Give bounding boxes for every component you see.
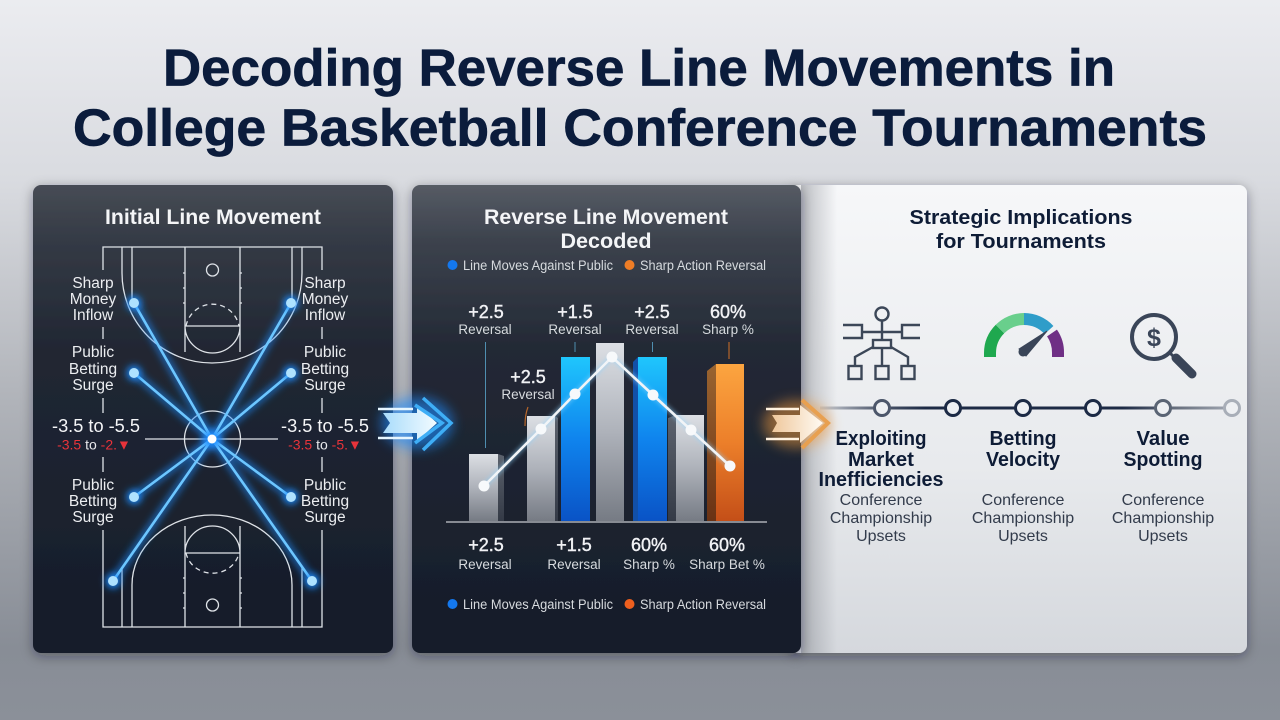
heading: strategic implications bbox=[910, 206, 1132, 253]
column: exploiting market inefficiencies: Upsets bbox=[856, 528, 906, 545]
line values: left: -3.5 to -2.▼ bbox=[57, 436, 131, 452]
court labels: right: Inflow bbox=[305, 307, 346, 324]
court labels: right bbox=[301, 275, 349, 526]
court labels: left bbox=[69, 275, 117, 526]
column: exploiting market inefficiencies: Inefficiencies bbox=[818, 468, 944, 491]
column: value spotting: Championship bbox=[1112, 510, 1214, 527]
court labels: right: Surge bbox=[304, 509, 346, 526]
chart labels: bottom: +2.5 bbox=[468, 535, 504, 555]
chart labels: top: Reversal bbox=[458, 322, 512, 337]
legend: top bbox=[448, 258, 766, 273]
chart labels: top: Sharp % bbox=[702, 322, 754, 337]
court labels: left: Betting bbox=[69, 361, 117, 378]
glowing line movement rays bbox=[106, 296, 319, 588]
legend: top: Line Moves Against Public bbox=[463, 258, 613, 273]
court labels: left: Public bbox=[72, 344, 114, 361]
column: exploiting market inefficiencies: Exploiting bbox=[836, 427, 926, 450]
column: betting velocity bbox=[972, 427, 1074, 545]
chart labels: top: 60% bbox=[710, 302, 746, 322]
legend: bottom: Sharp Action Reversal bbox=[640, 597, 766, 612]
column: betting velocity: Championship bbox=[972, 510, 1074, 527]
court labels: right: Betting bbox=[301, 361, 349, 378]
chart labels: top: +2.5 bbox=[634, 302, 670, 322]
chart labels: bottom: 60% bbox=[631, 535, 667, 555]
court labels: left: Money bbox=[70, 291, 117, 308]
column: value spotting: Spotting bbox=[1124, 448, 1202, 471]
court labels: right: Surge bbox=[304, 377, 346, 394]
chart labels: top: +2.5 bbox=[510, 367, 546, 387]
line values: left bbox=[52, 416, 140, 452]
line values: left: -3.5 to -5.5 bbox=[52, 416, 140, 436]
heading: reverse line movement decoded: Decoded bbox=[560, 230, 652, 253]
court labels: left: Betting bbox=[69, 493, 117, 510]
chart labels: top: Reversal bbox=[625, 322, 679, 337]
chart labels: top bbox=[458, 302, 754, 402]
line values: right bbox=[281, 416, 369, 452]
panel: initial line movement bbox=[33, 185, 393, 653]
heading: reverse line movement decoded bbox=[484, 206, 728, 253]
panel: reverse line movement decoded bbox=[412, 185, 801, 653]
heading: reverse line movement decoded: Reverse Line Movement bbox=[484, 206, 728, 229]
court labels: right: Public bbox=[304, 477, 346, 494]
heading: initial line movement: Initial Line Movement bbox=[105, 206, 321, 229]
column: exploiting market inefficiencies: Championship bbox=[830, 510, 932, 527]
line values: right: -3.5 to -5.▼ bbox=[288, 436, 362, 452]
court labels: right: Public bbox=[304, 344, 346, 361]
chart labels: top: Reversal bbox=[548, 322, 602, 337]
heading: strategic implications: for Tournaments bbox=[936, 230, 1106, 253]
chart labels: bottom: +1.5 bbox=[556, 535, 592, 555]
arrow: orange bbox=[763, 400, 831, 448]
court labels: left: Sharp bbox=[72, 275, 114, 292]
court labels: right: Sharp bbox=[304, 275, 346, 292]
chart labels: top: Reversal bbox=[501, 387, 555, 402]
title: College Basketball Conference Tournaments bbox=[73, 100, 1207, 158]
icon: dollar magnifier bbox=[1132, 315, 1192, 374]
trend line bbox=[478, 352, 736, 492]
icon: dollar magnifier: $ bbox=[1147, 324, 1161, 352]
column: exploiting market inefficiencies: Market bbox=[848, 448, 914, 471]
column: betting velocity: Betting bbox=[990, 427, 1056, 450]
chart labels: bottom bbox=[458, 535, 765, 572]
column: exploiting market inefficiencies bbox=[818, 427, 944, 545]
icon: velocity gauge bbox=[990, 319, 1058, 357]
title bbox=[73, 40, 1207, 158]
timeline bbox=[820, 400, 1240, 416]
chart labels: bottom: Reversal bbox=[458, 557, 512, 572]
column: value spotting: Value bbox=[1136, 427, 1190, 450]
court labels: right: Betting bbox=[301, 493, 349, 510]
court labels: right: Money bbox=[302, 291, 349, 308]
court labels: left: Surge bbox=[72, 377, 114, 394]
chart labels: top: +1.5 bbox=[557, 302, 593, 322]
court labels: left: Surge bbox=[72, 509, 114, 526]
title: Decoding Reverse Line Movements in bbox=[163, 40, 1115, 98]
column: betting velocity: Upsets bbox=[998, 528, 1048, 545]
basketball court bbox=[103, 247, 322, 627]
court labels: left: Public bbox=[72, 477, 114, 494]
panel: strategic implications bbox=[790, 185, 1247, 653]
column: value spotting: Upsets bbox=[1138, 528, 1188, 545]
column: value spotting: Conference bbox=[1122, 492, 1204, 509]
column: value spotting bbox=[1112, 427, 1214, 545]
chart labels: top: +2.5 bbox=[468, 302, 504, 322]
chart labels: bottom: Sharp Bet % bbox=[689, 557, 765, 572]
heading: strategic implications: Strategic Implications bbox=[910, 206, 1132, 229]
column: exploiting market inefficiencies: Conference bbox=[840, 492, 922, 509]
court labels: left: Inflow bbox=[73, 307, 114, 324]
icon: network hierarchy bbox=[843, 308, 920, 379]
chart labels: bottom: Reversal bbox=[547, 557, 601, 572]
column: betting velocity: Velocity bbox=[986, 448, 1061, 471]
chart labels: bottom: 60% bbox=[709, 535, 745, 555]
bar chart bbox=[446, 342, 767, 522]
column: betting velocity: Conference bbox=[982, 492, 1064, 509]
legend: top: Sharp Action Reversal bbox=[640, 258, 766, 273]
line values: right: -3.5 to -5.5 bbox=[281, 416, 369, 436]
legend: bottom bbox=[448, 597, 766, 612]
arrow: blue bbox=[378, 397, 453, 450]
chart labels: bottom: Sharp % bbox=[623, 557, 675, 572]
legend: bottom: Line Moves Against Public bbox=[463, 597, 613, 612]
